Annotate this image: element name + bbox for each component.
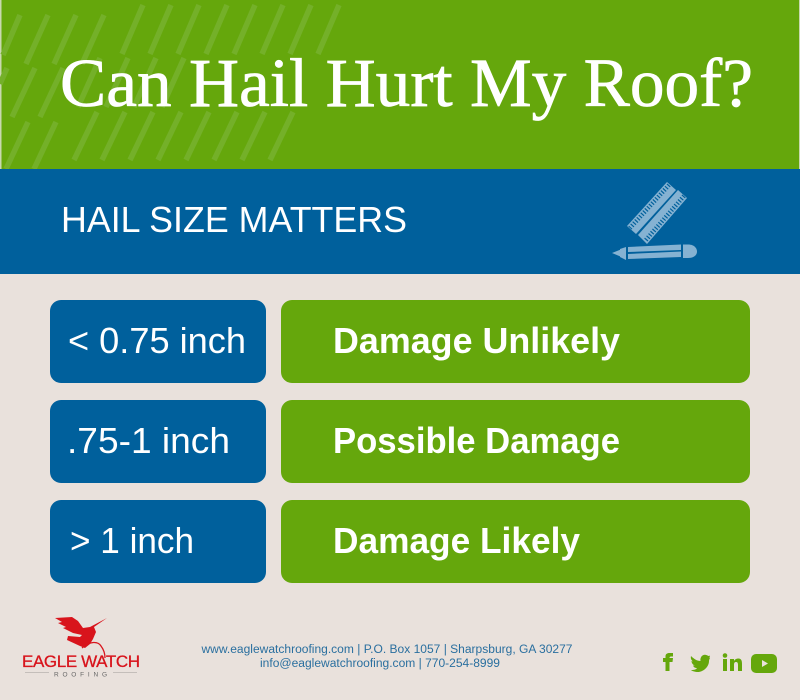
- row 3: [50, 500, 750, 583]
- result: possible damage: [281, 400, 750, 483]
- size label: under 0.75 inch: < 0.75 inch: [68, 320, 246, 361]
- icon: facebook: [663, 653, 673, 671]
- icon: twitter: [691, 655, 710, 672]
- title: Can Hail Hurt My Roof?: [60, 45, 753, 121]
- social icons: [663, 653, 777, 673]
- header banner: [0, 0, 800, 169]
- size label: under 0.75 inch: [50, 300, 266, 383]
- row 2: [50, 400, 750, 483]
- icon: eagle: [55, 617, 107, 658]
- result: damage likely: Damage Likely: [333, 520, 580, 561]
- contact details: info@eaglewatchroofing.com | 770-254-8999: [260, 658, 500, 670]
- icon: linkedin: [723, 653, 742, 671]
- contact details: [200, 644, 572, 670]
- row 1: [50, 300, 750, 383]
- result: possible damage: Possible Damage: [333, 420, 620, 461]
- logo tagline: ROOFING: [54, 672, 107, 678]
- result: damage unlikely: [281, 300, 750, 383]
- icon: ruler and pencil: [612, 182, 697, 260]
- result: damage unlikely: Damage Unlikely: [333, 320, 620, 361]
- size label: over 1 inch: [50, 500, 266, 583]
- size label: .75-1 inch: .75-1 inch: [67, 420, 230, 461]
- subtitle band: [0, 169, 800, 274]
- logo wordmark: EAGLE WATCH: [22, 652, 140, 671]
- subtitle: HAIL SIZE MATTERS: [61, 199, 407, 240]
- size label: .75-1 inch: [50, 400, 266, 483]
- size label: over 1 inch: > 1 inch: [70, 520, 194, 561]
- result: damage likely: [281, 500, 750, 583]
- contact details: www.eaglewatchroofing.com | P.O. Box 1057 | Sharpsburg, GA 30277: [200, 644, 572, 656]
- icon: youtube: [751, 654, 777, 673]
- logo: Eagle Watch Roofing: [22, 617, 140, 678]
